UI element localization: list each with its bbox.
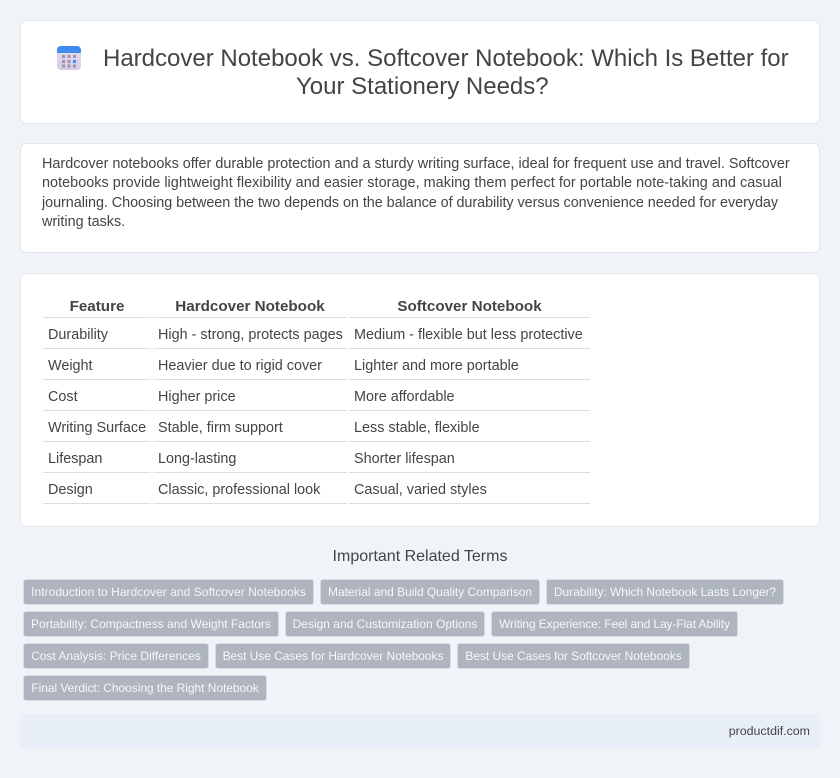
comparison table: More affordable: [354, 389, 455, 405]
heading: related terms: Important Related Terms: [333, 548, 507, 565]
comparison table: Stable, firm support: [158, 420, 283, 436]
column headings: Softcover Notebook: [397, 298, 542, 315]
related term tags: Introduction to Hardcover and Softcover Notebooks: [31, 585, 306, 599]
column headings: Feature: [70, 298, 124, 315]
footer bar: [20, 714, 820, 748]
comparison table: Shorter lifespan: [354, 451, 455, 467]
comparison table: Cost: [48, 389, 78, 405]
title: [103, 45, 789, 100]
comparison table: Medium - flexible but less protective: [354, 327, 583, 343]
comparison table: Lifespan: [48, 451, 102, 467]
related term tags: Best Use Cases for Hardcover Notebooks: [223, 649, 443, 663]
comparison table: Durability: [48, 327, 108, 343]
related term tags: Cost Analysis: Price Differences: [31, 649, 201, 663]
text block: introduction: Hardcover notebooks offer durable protection and a sturdy writing surface, ideal for frequent use and travel. Softcover: [42, 156, 790, 172]
text block: introduction: journaling. Choosing between the two depends on the balance of durability versus convenience needed for everyday: [42, 195, 778, 211]
column headings: [70, 298, 542, 315]
related term tags: Final Verdict: Choosing the Right Notebook: [31, 681, 259, 695]
comparison table: Long-lasting: [158, 451, 236, 467]
text: Hardcover Notebook vs. Softcover Notebook: Which Is Better for: [103, 45, 789, 72]
comparison table: Classic, professional look: [158, 482, 320, 498]
text block: introduction: [42, 156, 790, 230]
comparison table: Heavier due to rigid cover: [158, 358, 322, 374]
related term tags: Best Use Cases for Softcover Notebooks: [465, 649, 682, 663]
icon: calendar grid: [57, 46, 81, 70]
panel: comparison table card: [20, 273, 820, 527]
text: Your Stationery Needs?: [296, 73, 549, 100]
comparison table: Higher price: [158, 389, 236, 405]
comparison table: Lighter and more portable: [354, 358, 519, 374]
column headings: Hardcover Notebook: [175, 298, 325, 315]
comparison table: High - strong, protects pages: [158, 327, 343, 343]
related term tags: [23, 579, 784, 701]
comparison table: Writing Surface: [48, 420, 146, 436]
text block: introduction: writing tasks.: [42, 214, 125, 230]
comparison table: Weight: [48, 358, 93, 374]
related term tags: Durability: Which Notebook Lasts Longer?: [554, 585, 776, 599]
comparison table: Casual, varied styles: [354, 482, 487, 498]
comparison table: Less stable, flexible: [354, 420, 480, 436]
related term tags: Portability: Compactness and Weight Factors: [31, 617, 271, 631]
related term tags: Material and Build Quality Comparison: [328, 585, 532, 599]
panel: title card: [20, 20, 820, 124]
comparison table: [43, 298, 590, 504]
related term tags: Writing Experience: Feel and Lay-Flat Ability: [499, 617, 730, 631]
panel: intro card: [20, 143, 820, 253]
comparison table: Design: [48, 482, 93, 498]
related term tags: Design and Customization Options: [293, 617, 477, 631]
footer source text: productdif.com: [729, 724, 810, 738]
text block: introduction: notebooks provide lightweight flexibility and easier storage, making them perfect for portable note-taking and casual: [42, 175, 782, 191]
